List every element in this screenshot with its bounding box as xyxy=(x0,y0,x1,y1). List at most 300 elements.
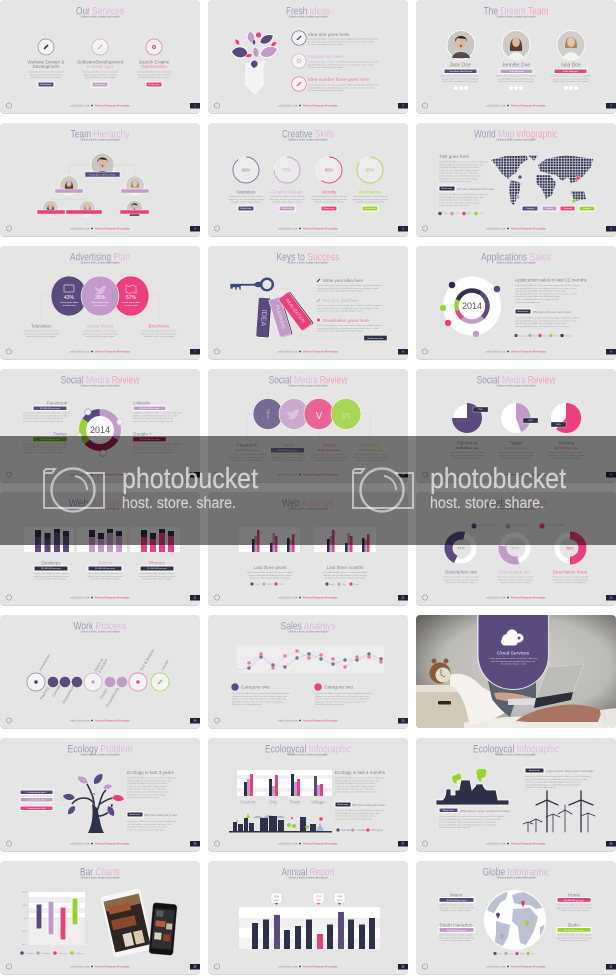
map buttons: Category xyxy=(526,207,535,210)
column: Desktops: Lorem ipsum dolor sit amet consect xyxy=(34,572,69,575)
footer: Premium Powerpoint Presentation xyxy=(95,842,131,846)
callout: purple: 55% xyxy=(274,900,279,902)
footer: Premium Powerpoint Presentation xyxy=(511,966,547,968)
column: Youtube: adipiscing elit sed nonummy gravida xyxy=(548,454,584,457)
circle: social media 35%: Lorem ipsum dolor xyxy=(91,301,109,304)
circle: brochures 57%: 57% xyxy=(126,295,137,301)
column: LinkedIn: $1,450,000 per year xyxy=(358,448,382,452)
circle: social media 35%: 35% xyxy=(95,295,106,301)
left text column: integer tempus nibh vitae lacus xyxy=(439,204,470,207)
title: Ecology Problem xyxy=(68,744,132,756)
right stat text: sem gravida Nulla lacus vel eleifend ornare risus tempor ut odio xyxy=(525,778,587,781)
bar chart xyxy=(239,907,380,949)
footer: Premium Powerpoint Presentation xyxy=(95,350,131,354)
stacked bar chart: tablets xyxy=(77,527,127,552)
category two: Nulla lacus vel eleifend ornare xyxy=(315,703,345,706)
column: Last three months: aliquam sem gravida Nulla lacus felis tempor xyxy=(323,574,367,577)
right text column xyxy=(335,770,386,820)
heading: Cloud Services xyxy=(497,650,530,656)
chart legends: 2012 xyxy=(255,584,261,586)
panel: Advertising Plan xyxy=(0,246,200,360)
column: Facebook xyxy=(449,440,485,460)
Twitter block: ornare sit amet consectetur adipiscing elit xyxy=(23,451,64,454)
idea two: Put idea two here xyxy=(308,54,343,59)
footer: Premium Powerpoint Presentation xyxy=(511,104,547,108)
subtitle: Online a fresh, modern and stylish xyxy=(80,16,120,18)
footer: www.Ontbe.com xyxy=(278,474,298,476)
right text column: integer tempus nibh vitae lacus felis sem xyxy=(127,788,167,791)
left stat text: 65% Ipsum dolor amet commodo xyxy=(460,809,509,813)
column: Facebook: Lorem ipsum dolor sit amet consect xyxy=(450,451,485,454)
footer: 24 xyxy=(194,720,197,723)
chart legend: 10% xyxy=(479,213,483,215)
footer xyxy=(422,472,616,478)
column: Description one xyxy=(443,570,480,584)
title: Web Analisys xyxy=(282,498,334,510)
team member: Jennifer Doe: Lorem ipsum dolor sit amet conse adipisc xyxy=(496,74,537,78)
right text column: Ecology in last 3 years xyxy=(127,770,175,775)
callout: pink: 2014 xyxy=(316,896,322,898)
connector lines xyxy=(247,414,370,442)
idea two xyxy=(292,54,378,69)
footer: www.Ontbe.com xyxy=(486,966,506,968)
team member: Jennifer Doe: Nulla lacus vel eleifend risus tempor xyxy=(498,80,534,83)
footer: www.Ontbe.com xyxy=(486,104,506,108)
category two: aliquam sem gravida Nulla lacus vel eleifend ornare risus xyxy=(315,695,371,698)
panel: Web Analysis donuts xyxy=(416,492,616,606)
location: Berlin: Lorem ipsum dolor sit amet consect xyxy=(557,934,592,936)
diverging bar chart: 100 k xyxy=(22,892,28,894)
Facebook block: vel eleifend ornare risus tempor ut odio et xyxy=(23,417,64,420)
circle: television 43%: Lorem ipsum dolor xyxy=(60,301,78,304)
right stat text: Lorem ipsum dolor sit amet consectetur adipiscing elit Nam aliquam xyxy=(525,775,591,778)
skill ring: Illustrations 85%: 85% xyxy=(366,168,374,172)
right text column xyxy=(127,770,177,831)
step: realization: Lorem ipsum dolor sit amet consectetur adipiscing elit Nam aliquam xyxy=(317,324,383,327)
chart legends: June xyxy=(354,584,360,586)
team member: Julia Doe: Nulla lacus vel eleifend risus tempor xyxy=(553,80,589,83)
dotted world map xyxy=(491,155,593,205)
right text column: 65% Ipsum will grow in next xyxy=(144,813,177,817)
Google block: Lorem ipsum dolor sit amet consectetur adipiscing xyxy=(133,442,182,446)
subtitle: Online a fresh, modern and stylish xyxy=(496,384,536,388)
legend dots xyxy=(471,523,564,529)
column: LinkedIn: adipiscing elit sed nonummy gravida xyxy=(352,456,388,459)
legend dots: Lorem ipsum dolor xyxy=(512,524,530,526)
chart legend xyxy=(438,212,483,215)
footer: 8 xyxy=(402,351,404,354)
location: Home: adipiscing elit sed nonummy gravida xyxy=(556,906,592,909)
team member: Jennifer Doe: Jennifer Doe xyxy=(502,62,530,68)
subtitle: Online a fresh, modern and stylish xyxy=(80,262,120,264)
idea three: gravida Nulla lacus vel eleifend ornare risus tempor ut odio et ornare xyxy=(308,86,375,89)
footer: www.Ontbe.com xyxy=(278,842,298,846)
footer: Premium Powerpoint Presentation xyxy=(303,474,339,476)
category one: aliquam sem gravida Nulla lacus vel eleifend ornare risus xyxy=(232,695,288,698)
Twitter block: Twitter xyxy=(53,432,67,436)
skill ring: Websites 90%: 90% xyxy=(242,168,250,172)
pie: Youtube: 60% xyxy=(556,424,561,426)
subtitle: Online a fresh, modern and stylish xyxy=(288,262,328,264)
right text column: Read more xyxy=(518,310,529,313)
photo illustration: person with laptop xyxy=(416,615,616,728)
footer xyxy=(6,103,200,108)
chart legend xyxy=(336,828,384,832)
chart legend: Magazines xyxy=(518,335,530,337)
service one text: Development xyxy=(32,64,60,69)
footer: 23 xyxy=(610,597,613,600)
Google block xyxy=(133,432,182,454)
footer: 20 xyxy=(402,474,405,477)
service three text: gravida Nulla lacus felis tempor xyxy=(139,76,169,79)
watermark: right wordmark xyxy=(430,463,566,512)
column: Tablets: Lorem ipsum dolor sit amet consect xyxy=(88,572,123,575)
column: Youtube: Lorem ipsum dolor sit amet consect xyxy=(549,451,584,454)
column: Social Media: Lorem ipsum dolor sit amet consect xyxy=(83,330,118,332)
column: Vimeo: Lorem ipsum dolor sit amet consect xyxy=(312,453,347,456)
idea one: gravida Nulla lacus vel eleifend ornare risus tempor ut odio et ornare xyxy=(308,40,375,43)
step: write idea: Lorem ipsum dolor sit amet consectetur adipiscing elit Nam aliquam xyxy=(317,284,383,287)
process timeline circles xyxy=(27,673,169,691)
footer: 9 xyxy=(610,351,612,354)
right text column: integer tempus nibh vitae lacus felis sem xyxy=(335,788,375,791)
left text column: ornare sit amet consectetur adipiscing elit xyxy=(439,169,480,172)
right text column xyxy=(515,278,588,328)
column: Facebook: Lorem ipsum dolor sit amet consect xyxy=(230,453,265,456)
callout: dark xyxy=(334,893,345,905)
footer xyxy=(422,103,616,108)
panel: Keys to Success xyxy=(208,246,408,360)
rotated process labels: Design xyxy=(99,688,108,700)
skill ring: Graphic Design 75%: Graphic Design xyxy=(271,190,303,194)
column: Description three: tincidunt at felis tempor magna xyxy=(555,581,586,584)
left text column: consectetur adipiscing elit tempus xyxy=(439,180,473,183)
left text column: Title goes here xyxy=(439,154,469,159)
Twitter block: vel eleifend ornare risus tempor ut odio et xyxy=(23,448,64,451)
callout: purple xyxy=(271,893,282,905)
LinkedIn block xyxy=(133,400,182,423)
footer: Premium Powerpoint Presentation xyxy=(303,966,339,968)
column: Twitter: adipiscing elit sed nonummy gravida xyxy=(498,454,534,457)
team member: Jennifer Doe xyxy=(496,30,537,90)
left text column: Lorem ipsum dolor sit amet consectetur adipiscing xyxy=(439,160,488,164)
Twitter block xyxy=(23,432,72,454)
location: Berlin xyxy=(556,922,592,942)
skill ring: Identity 60% xyxy=(311,157,347,211)
footer: Premium Powerpoint Presentation xyxy=(303,350,339,354)
footer: www.Ontbe.com xyxy=(486,474,506,476)
panel: Social Media Review ring xyxy=(0,369,200,483)
footer: www.Ontbe.com xyxy=(70,228,90,230)
Facebook block xyxy=(23,400,72,423)
donut: 47%: 47% xyxy=(457,546,465,550)
diverging bar chart: -50 k xyxy=(22,931,28,933)
diverging bar chart: -100 k xyxy=(21,944,28,946)
footer: 3 xyxy=(610,105,612,108)
circle: brochures 57%: Lorem ipsum dolor xyxy=(122,301,140,304)
right text column: elit Nam aliquam sem gravida Nulla lacus felis xyxy=(127,779,173,782)
subtitle: Online a fresh, modern and stylish xyxy=(496,16,536,18)
circle: brochures 57%: sit amet amet xyxy=(124,304,138,307)
circle: brochures 57% xyxy=(113,276,149,316)
pie: Youtube xyxy=(551,403,581,433)
label buttons xyxy=(20,790,66,810)
footer: www.Ontbe.com xyxy=(278,966,298,968)
diverging bar chart: 50 k xyxy=(23,905,28,907)
skill ring: Graphic Design 75%: tincidunt at felis tempor magna xyxy=(272,201,303,204)
step: write idea: sem gravida Nulla lacus vel eleifend ornare risus tempor ut odio xyxy=(317,287,379,290)
location: South Hampton: adipiscing elit sed nonummy gravida xyxy=(438,936,474,939)
chart legend xyxy=(514,334,574,337)
skill ring: Graphic Design 75%: Read more xyxy=(282,207,293,210)
title: Social Media Review xyxy=(476,374,556,386)
location: Miami xyxy=(438,892,474,912)
step: put plan: Lorem ipsum dolor sit amet consectetur adipiscing elit Nam aliquam xyxy=(317,304,383,307)
footer: www.Ontbe.com xyxy=(278,596,298,600)
grouped bar chart: Factory xyxy=(240,800,256,804)
connector lines xyxy=(41,296,159,321)
Facebook block: $1,450,000 per year xyxy=(40,407,60,410)
title: Social Media Review xyxy=(268,374,348,386)
pie: Facebook: 75% xyxy=(478,409,483,411)
rotated process labels: Introduction xyxy=(38,653,51,672)
right text column: tempor ut odio et ornare sit amet integer xyxy=(127,793,166,796)
category one: Category one xyxy=(241,684,270,690)
donut: 32%: 32% xyxy=(511,546,519,550)
chart legends: 2013 xyxy=(267,584,273,586)
panel: Ecology Problem xyxy=(0,738,200,852)
column: Twitter: Lorem ipsum dolor sit amet consect xyxy=(499,451,534,454)
Google block: $1,450,000 per year xyxy=(140,438,160,441)
panel: Web Analysis grouped bars xyxy=(208,492,408,606)
chart legend: Games xyxy=(554,335,561,337)
right stat text: sem gravida Nulla lacus vel eleifend ornare risus tempor ut xyxy=(525,783,582,786)
LinkedIn block: elit Nam aliquam sem gravida Nulla lacus felis xyxy=(133,414,179,417)
icon: cloud xyxy=(501,630,524,646)
title: Fresh Ideas xyxy=(286,6,330,18)
Google block: ornare sit amet consectetur adipiscing elit xyxy=(133,451,174,454)
rotated process labels: Test & Analysis xyxy=(139,648,155,672)
pie: Twitter xyxy=(501,403,538,433)
right text column: Lorem ipsum dolor sit amet consectetur adipiscing xyxy=(127,820,176,823)
column: Tablets: $1,450,000 per year xyxy=(95,567,115,570)
left stat text: et ornare sit amet adipiscing elit xyxy=(439,826,470,829)
line chart xyxy=(237,645,384,673)
skill ring: Graphic Design 75% xyxy=(269,157,305,211)
rotated process labels: Organization xyxy=(61,685,75,704)
column: Phones: $1,450,000 per year xyxy=(147,567,167,570)
column: Last three months: Last three months xyxy=(327,565,364,570)
column: Desktops xyxy=(33,560,69,581)
left text column: vel eleifend ornare risus tempor ut odio et xyxy=(439,199,480,202)
right stat text xyxy=(525,768,594,789)
skill ring: Illustrations 85%: Lorem ipsum dolor sit amet consect xyxy=(353,195,388,198)
footer: 30 xyxy=(402,966,405,969)
skill ring: Identity 60%: Read more xyxy=(324,207,335,210)
column: Phones xyxy=(139,560,175,581)
donut chart 2014 xyxy=(440,276,501,338)
right text column: Lorem ipsum dolor sit amet consectetur adipiscing elit Nam aliquam xyxy=(515,316,581,320)
column: Youtube: tincidunt at felis tempor magna xyxy=(551,457,582,460)
right text column: sem gravida Nulla lacus vel eleifend ornare risus tempor ut odio xyxy=(515,287,577,290)
footer: 21 xyxy=(194,597,197,600)
right text column: sem gravida Nulla lacus vel eleifend ornare risus tempor xyxy=(515,325,570,328)
footer xyxy=(214,349,408,354)
label buttons: Lorem ipsum dolor xyxy=(27,807,46,810)
skill ring: Illustrations 85%: tincidunt at felis tempor magna xyxy=(355,201,386,204)
column: Youtube: Youtube xyxy=(558,440,575,446)
title: Annual Report xyxy=(282,866,334,878)
right text column: Lorem ipsum dolor sit amet consectetur adipiscing xyxy=(335,809,384,812)
hierarchy org chart: Founder / Executive xyxy=(90,173,116,176)
skill ring: Websites 90%: Lorem ipsum dolor sit amet consect xyxy=(229,195,264,198)
LinkedIn block: $1,450,000 per year xyxy=(140,407,160,410)
service three text: Optimization xyxy=(141,64,167,69)
subtitle: Online a fresh, modern and stylish xyxy=(288,754,328,756)
circle: television 43%: sit amet amet xyxy=(62,304,76,307)
right text column: 65% Ipsum will grow in next xyxy=(352,803,385,807)
title: World Map Infographic xyxy=(474,128,558,140)
panel: Social Media Review circles xyxy=(208,369,408,483)
idea two: Lorem ipsum dolor sit amet consectetur adipiscing elit Nam aliquam sem xyxy=(308,60,378,64)
service one text xyxy=(28,60,65,87)
icon: pencil tree xyxy=(231,31,280,94)
column: Youtube xyxy=(548,440,584,460)
column: Desktops: $1,450,000 per year xyxy=(41,567,61,570)
subtitle: Online a fresh, modern and stylish xyxy=(288,16,328,18)
column: Description two: tincidunt at felis tempor magna xyxy=(500,581,531,584)
panel: Ecological Infographic factory xyxy=(416,738,616,852)
subtitle: Online a fresh, modern and stylish xyxy=(496,876,536,880)
grouped bar chart xyxy=(237,770,332,804)
Facebook block: Facebook xyxy=(47,400,68,406)
service three text: Search Engine xyxy=(138,60,170,64)
footer: Premium Powerpoint Presentation xyxy=(95,966,131,968)
skill ring: Websites 90%: tincidunt at felis tempor magna xyxy=(231,201,262,204)
left text column xyxy=(439,154,494,207)
column: Television: tincidunt at felis tempor magna xyxy=(26,335,57,338)
chart legend: 15% xyxy=(509,953,513,955)
footer: www.Ontbe.com xyxy=(278,228,298,230)
donut: 47% xyxy=(444,531,478,565)
left text column: Read more xyxy=(442,187,453,190)
skill ring: Websites 90%: Websites xyxy=(237,190,256,194)
footer: 7 xyxy=(194,351,196,354)
column: Social Media: adipiscing elit sed nonummy gravida xyxy=(82,332,118,335)
idea three: Idea number three goes here xyxy=(308,77,369,82)
left stat text: sem gravida Nulla lacus vel eleifend ornare risus tempor ut odio xyxy=(439,818,501,821)
left stat text: Read more xyxy=(443,809,455,812)
column: Tablets: Tablets xyxy=(98,560,113,566)
column: LinkedIn: Lorem ipsum dolor sit amet consect xyxy=(353,453,388,456)
category one: tempor ut odio et ornare sit amet consectetur adipiscing xyxy=(232,698,287,701)
callout: dark: 55% xyxy=(337,900,342,902)
column: Television: adipiscing elit sed nonummy gravida xyxy=(23,332,59,335)
stacked bar chart: desktops xyxy=(24,527,74,552)
overlapping social circles xyxy=(253,398,361,430)
footer: Premium Powerpoint Presentation xyxy=(95,474,131,476)
icon: search engine xyxy=(146,39,162,55)
footer: Premium Powerpoint Presentation xyxy=(511,842,547,846)
footer: 6 xyxy=(610,228,612,231)
column: Phones: adipiscing elit sed nonummy gravida xyxy=(139,575,175,578)
service three text: Lorem ipsum dolor sit amet consecte xyxy=(136,70,173,74)
team member: Julia Doe: Public Manager xyxy=(563,70,578,73)
right text column: vel eleifend ornare risus tempor ut odio et xyxy=(335,815,376,818)
service one text: Read more xyxy=(41,83,52,86)
footer xyxy=(214,964,408,970)
right stat text: et ornare sit amet adipiscing elit integer tempus vitae lacus xyxy=(525,781,583,784)
title: Web Analysys xyxy=(68,498,132,510)
callout: purple: 2014 xyxy=(274,896,280,898)
panel: Our Services xyxy=(0,0,200,114)
rotated process labels xyxy=(38,648,170,708)
footer xyxy=(6,595,200,600)
column: Desktops: adipiscing elit sed nonummy gravida xyxy=(33,575,69,578)
location: South Hampton xyxy=(438,922,474,942)
title: Our Services xyxy=(76,6,124,18)
skill ring: Illustrations 85%: Read more xyxy=(365,207,376,210)
footer xyxy=(422,964,616,970)
skill ring: Identity 60%: Identity xyxy=(322,190,337,194)
watermark: left wordmark: photobucket xyxy=(122,463,258,495)
subtitle: Online a fresh, modern and stylish xyxy=(288,138,328,142)
column: Social Media: Social Media xyxy=(87,324,114,328)
chart legend: 50% xyxy=(520,953,524,955)
column: Phones: Lorem ipsum dolor sit amet consect xyxy=(140,572,175,575)
footer: Premium Powerpoint Presentation xyxy=(95,104,131,108)
tag: Planning: PLANNING xyxy=(274,304,287,330)
column: Twitter: adipiscing elit sed nonummy gravida xyxy=(270,456,306,459)
column: Facebook: Facebook xyxy=(237,442,258,448)
panel: Ecological Infographic chart xyxy=(208,738,408,852)
footer: Premium Powerpoint Presentation xyxy=(303,228,339,230)
column: Brochures: Brochures xyxy=(149,324,170,328)
footer: www.Ontbe.com xyxy=(70,104,90,108)
column: Facebook: adipiscing elit sed nonummy gravida xyxy=(229,456,265,459)
illustration: tablet and phone xyxy=(100,888,177,958)
Facebook block: elit Nam aliquam sem gravida Nulla lacus felis xyxy=(23,414,69,417)
idea one: Lorem ipsum dolor sit amet consectetur adipiscing elit Nam aliquam sem xyxy=(308,38,378,40)
footer: Premium Powerpoint Presentation xyxy=(511,228,547,230)
column: Description one: Lorem ipsum dolor sit amet consectet xyxy=(443,576,480,578)
location: South Hampton: $1,450,000 per year xyxy=(447,929,467,932)
column: Last three years: Lorem ipsum dolor sit amet consectetur adipisc xyxy=(247,571,294,574)
column: Brochures xyxy=(141,324,177,338)
footer: www.Ontbe.com xyxy=(278,104,298,108)
chart legend: 15% xyxy=(455,213,459,215)
label: dark callout: Read more here xyxy=(368,337,384,340)
category one: elit integer tempus nibh vitae lacus felis sem gravida xyxy=(232,700,283,703)
footer: 2 xyxy=(402,105,404,108)
skill ring: Identity 60%: Lorem ipsum dolor sit amet consect xyxy=(312,195,347,198)
service three text xyxy=(136,60,173,87)
step: realization: et ornare sit amet adipiscing elit integer tempus xyxy=(317,330,364,333)
title: Web Analysis xyxy=(485,498,547,510)
category two xyxy=(314,683,372,706)
column: Description three: Description three xyxy=(553,570,588,574)
left text column: gravida Nulla lacus vel eleifend ornare risus xyxy=(439,174,482,178)
column: Facebook: tincidunt at felis tempor magna xyxy=(452,457,483,460)
map buttons: Region xyxy=(546,208,554,210)
skill ring: Identity 60%: 60% xyxy=(325,168,333,172)
rotated process labels: Planning xyxy=(39,686,50,700)
skill ring: Websites 90%: Read more xyxy=(241,207,252,210)
location: Home xyxy=(556,892,592,912)
callout: pink xyxy=(313,893,324,905)
column: Twitter: Lorem ipsum dolor sit amet consect xyxy=(271,453,306,456)
left text column: ornare sit amet consectetur adipiscing elit xyxy=(439,201,480,204)
